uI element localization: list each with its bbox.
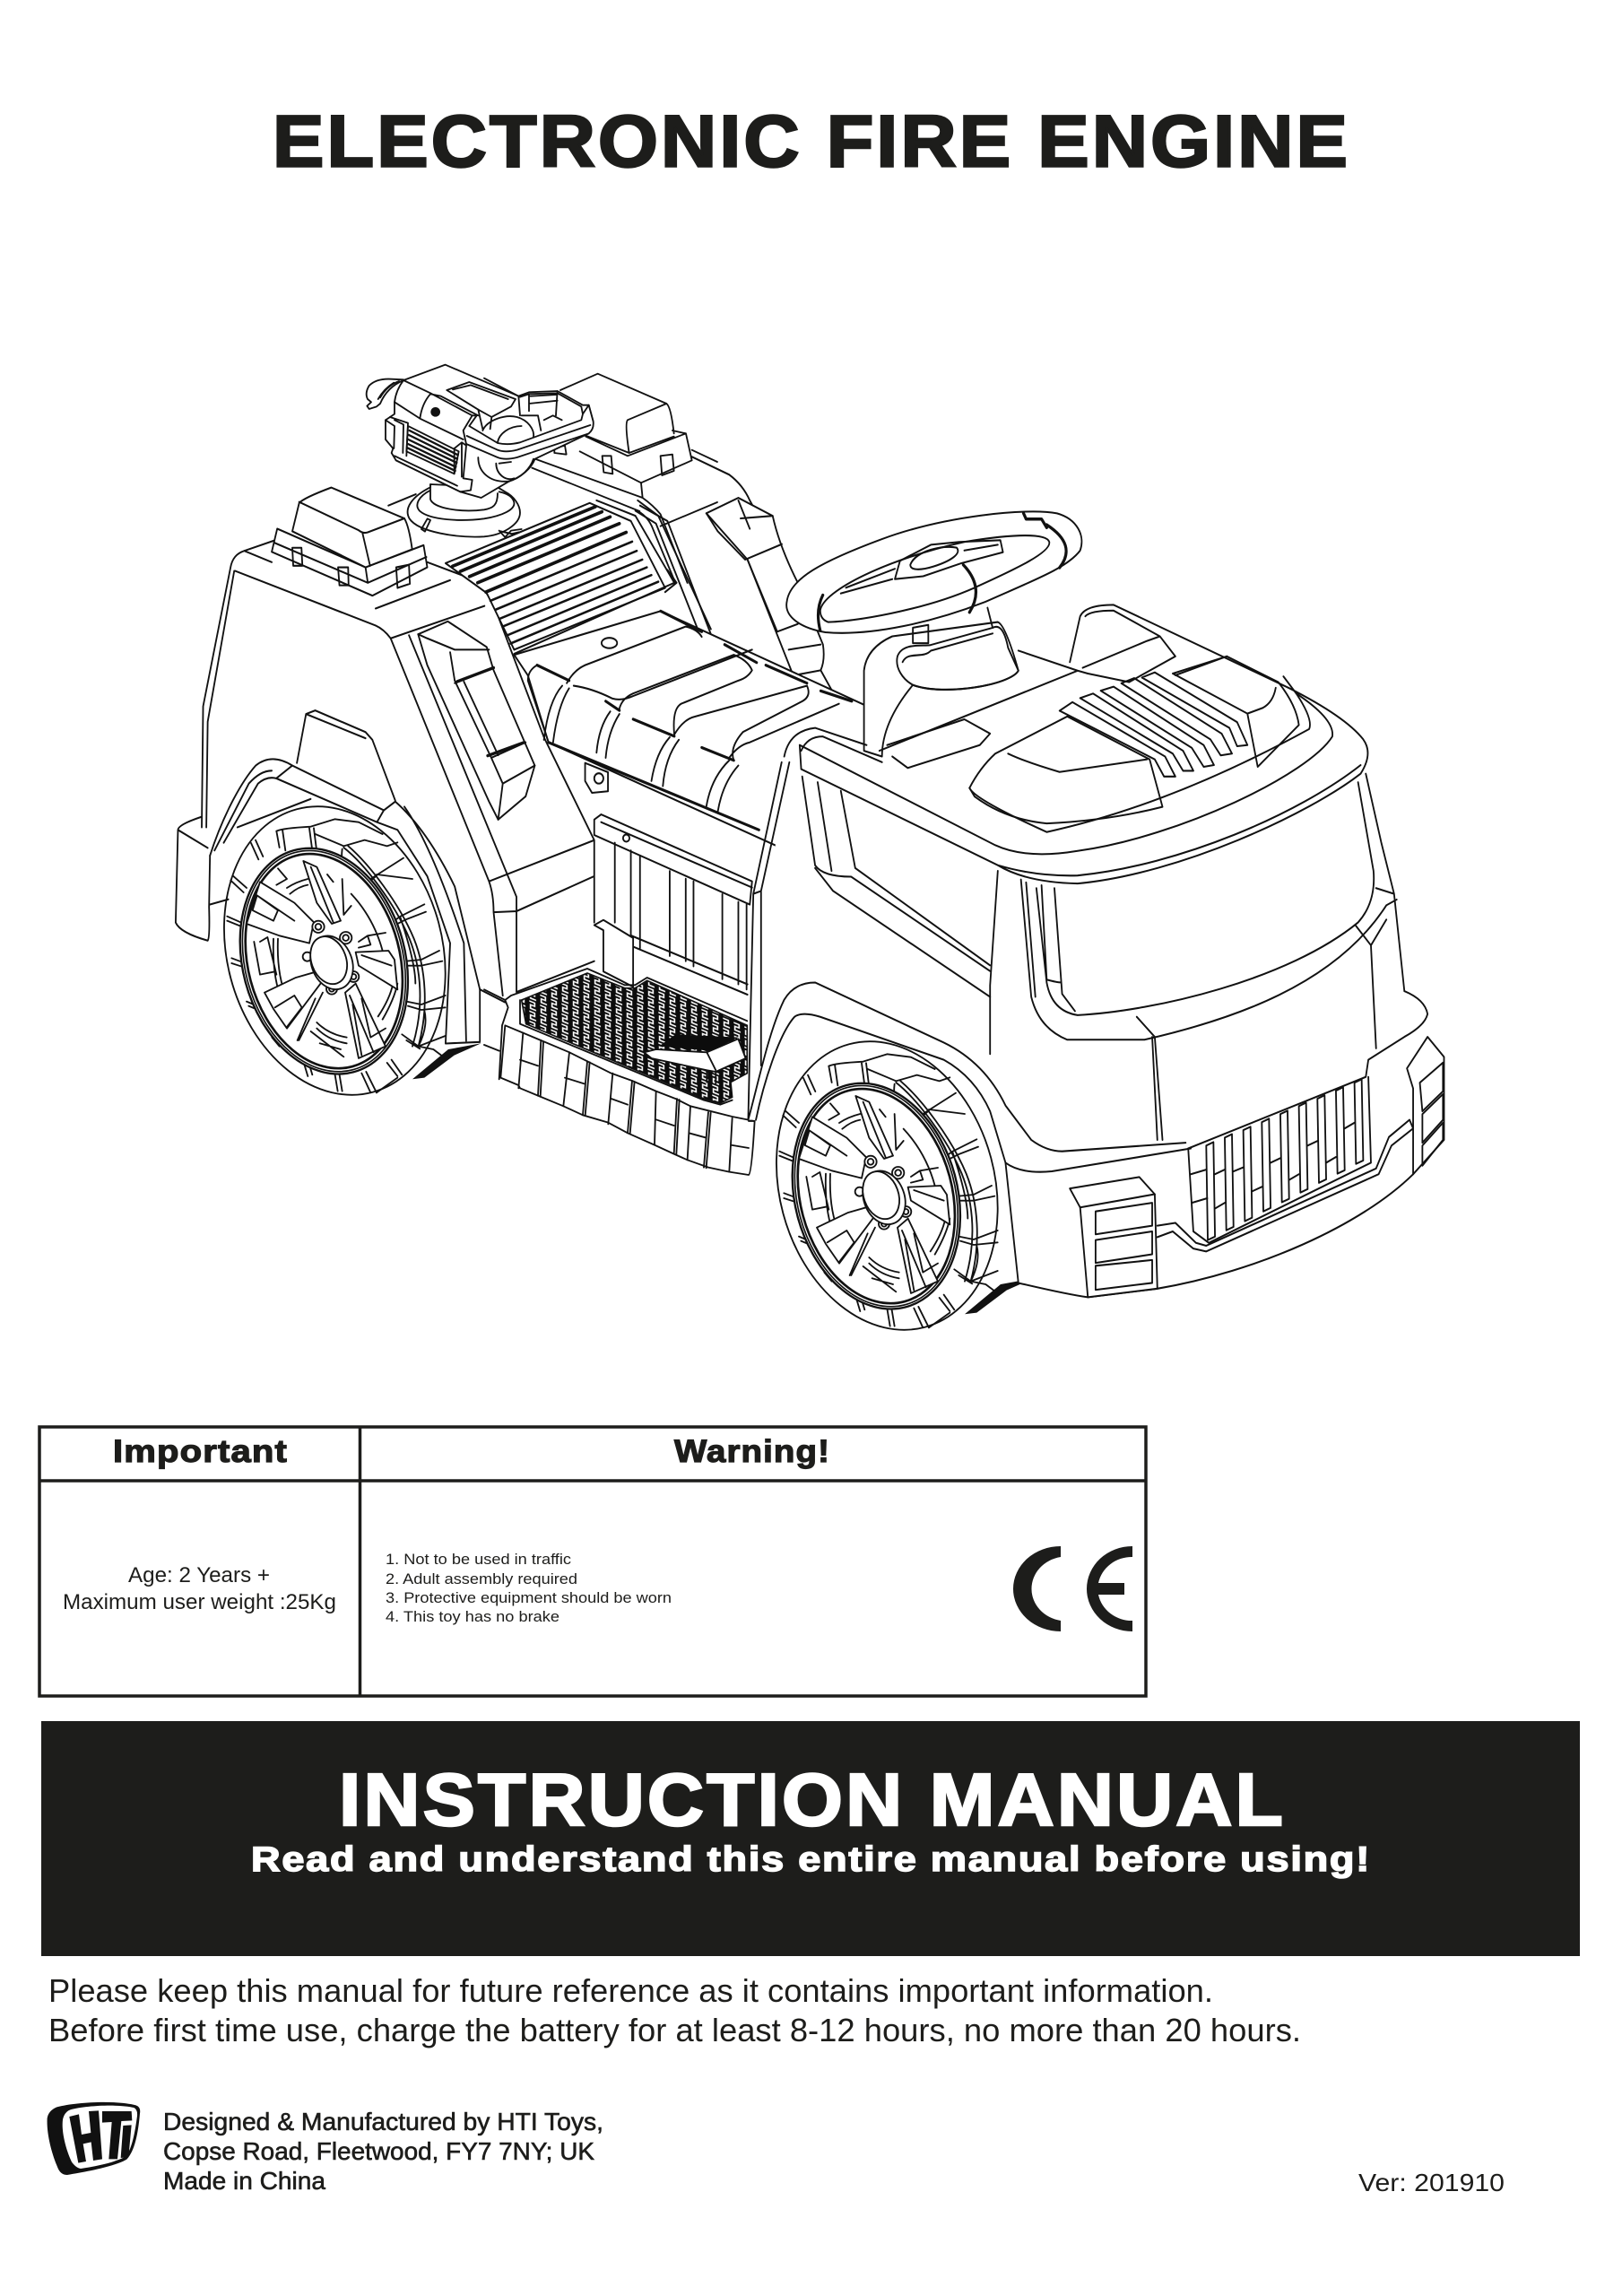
age and weight limits: Age: 2 Years + [128, 1563, 270, 1587]
bumper [1005, 991, 1427, 1297]
icon: CE mark [1013, 1546, 1132, 1631]
near side handle [418, 622, 534, 820]
front fender [748, 982, 1191, 1172]
illustration: electronic fire engine ride-on toy [176, 365, 1444, 1355]
table heading: warning: Warning! [674, 1434, 830, 1469]
far roof block and light cap [532, 374, 717, 583]
title: ELECTRONIC FIRE ENGINE [273, 100, 1350, 183]
near light cap [292, 488, 412, 568]
frame bars behind seat [594, 814, 752, 995]
rear bumper end [176, 799, 310, 941]
age and weight limits: Maximum user weight :25Kg [63, 1590, 336, 1614]
warning list: 3. Protective equipment should be worn [386, 1589, 672, 1606]
vent panel [446, 503, 665, 649]
specifications table [39, 1427, 1146, 1696]
near cap base [272, 529, 428, 596]
side window [802, 777, 990, 996]
cab side pillar [748, 762, 789, 1120]
notice text: Please keep this manual for future reference as it contains important information. [48, 1972, 1213, 2009]
battery seat box [514, 611, 912, 865]
grille [1188, 1077, 1371, 1243]
right marker light [1407, 1037, 1444, 1174]
rear body with fender and bumper [176, 488, 711, 1044]
floor with non-slip tread and pedal [484, 969, 755, 1175]
warning list [386, 1551, 672, 1625]
front cab body [748, 511, 1444, 1297]
left marker light [1070, 1177, 1158, 1297]
manufacturer address: Designed & Manufactured by HTI Toys, [163, 2108, 603, 2135]
running board [500, 1025, 755, 1175]
manufacturer address [163, 2108, 603, 2195]
banner: instruction manual: INSTRUCTION MANUAL [339, 1758, 1286, 1841]
steering column pod [864, 622, 1019, 756]
rear hood handle [1070, 604, 1288, 688]
rear fender arch [210, 759, 480, 1044]
warning list: 1. Not to be used in traffic [386, 1551, 572, 1568]
age and weight limits [63, 1563, 336, 1614]
warning list: 4. This toy has no brake [386, 1608, 559, 1625]
version number: Ver: 201910 [1358, 2169, 1505, 2196]
banner: instruction manual: Read and understand this entire manual before using! [251, 1840, 1371, 1879]
banner: instruction manual [41, 1721, 1580, 1956]
warning list: 2. Adult assembly required [386, 1570, 577, 1587]
engine cover [969, 717, 1163, 823]
icon: HTI logo [48, 2102, 140, 2175]
cabin top shell [785, 688, 1367, 883]
table heading: important: Important [113, 1434, 288, 1469]
rear wheel [193, 781, 481, 1120]
manufacturer address: Made in China [163, 2167, 326, 2195]
engine vents [1060, 673, 1247, 777]
water cannon turret [367, 365, 594, 537]
manufacturer address: Copse Road, Fleetwood, FY7 7NY; UK [163, 2137, 595, 2165]
cab lower band [1021, 774, 1404, 1039]
far side handle and pillar [636, 457, 832, 691]
steering wheel [786, 511, 1081, 633]
notice text: Before first time use, charge the battery for at least 8-12 hours, no more than 20 hours. [48, 2012, 1301, 2048]
pedal [644, 1039, 746, 1072]
front wheel [745, 1016, 1034, 1355]
windshield [1037, 782, 1374, 1015]
fender peak [297, 710, 395, 801]
notice text [48, 1972, 1301, 2048]
